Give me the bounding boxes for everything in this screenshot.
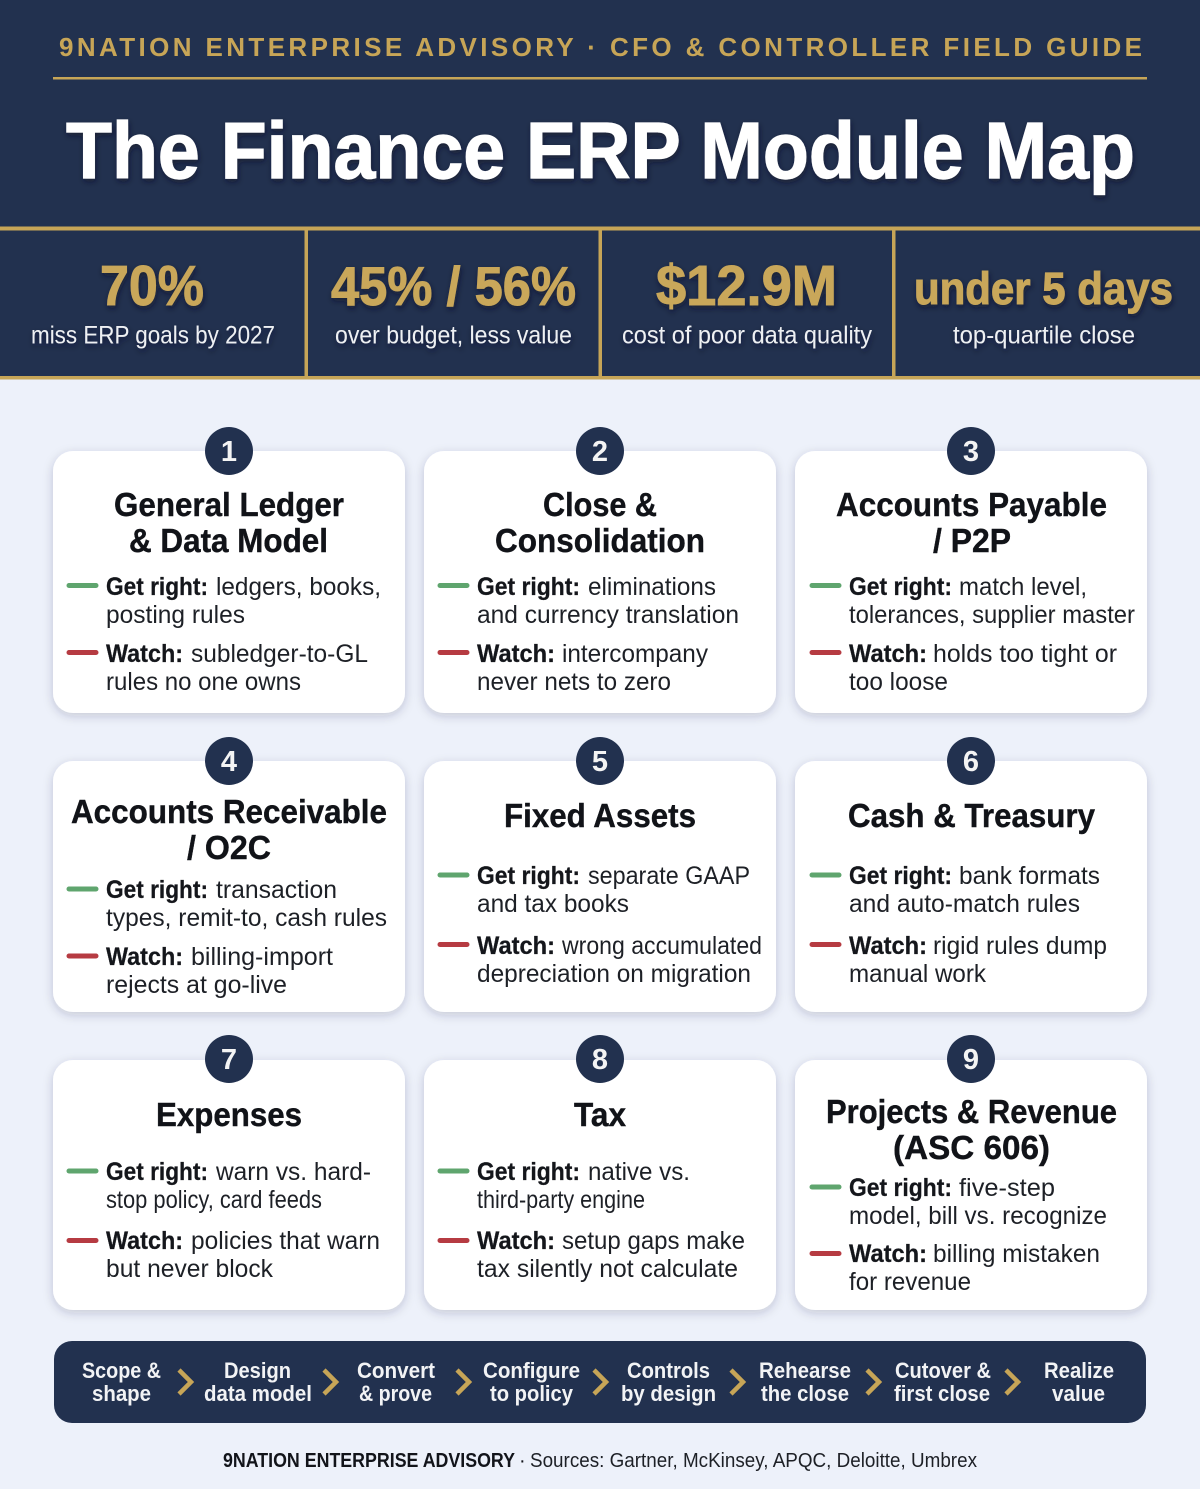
card 2: Close & Consolidation: intercompany <box>562 640 708 668</box>
card 4: Accounts Receivable: Get right: <box>106 876 208 904</box>
card 2: Close & Consolidation: Close & <box>543 486 657 523</box>
card 9: Projects & Revenue: (ASC 606) <box>893 1129 1050 1166</box>
card 7: Expenses: Expenses <box>156 1096 302 1133</box>
card 9: Projects & Revenue: Get right: <box>849 1174 952 1202</box>
card 3: Accounts Payable: Accounts Payable <box>836 486 1107 523</box>
arrow 3 <box>457 1370 469 1394</box>
step 2 <box>204 1358 312 1406</box>
step 6: the close <box>761 1381 849 1406</box>
step 1 <box>82 1358 161 1406</box>
arrow 2 <box>324 1370 336 1394</box>
card 6: Cash & Treasury: Watch: <box>849 932 927 960</box>
card 7: Expenses: Watch: <box>106 1227 183 1255</box>
card 6: Cash & Treasury: and auto-match rules <box>849 890 1080 918</box>
card 2: Close & Consolidation: 2 <box>592 436 608 468</box>
card 1: General Ledger: subledger-to-GL <box>191 640 368 668</box>
card 6: Cash & Treasury <box>795 737 1147 1012</box>
card 4: Accounts Receivable: Accounts Receivable <box>71 793 387 830</box>
stat: 70% <box>31 254 275 350</box>
arrow 7 <box>1006 1370 1018 1394</box>
card 3: Accounts Payable: holds too tight or <box>933 640 1117 668</box>
stat: 45% / 56% <box>331 255 576 350</box>
card 2: Close & Consolidation: Get right: <box>477 573 580 601</box>
card 2: Close & Consolidation: never nets to zero <box>477 668 671 696</box>
step 6 <box>759 1358 851 1406</box>
step 8: value <box>1052 1381 1105 1406</box>
stat: under 5 days: under 5 days <box>914 263 1173 314</box>
card 9: Projects & Revenue: five-step <box>959 1174 1055 1202</box>
card 3: Accounts Payable: 3 <box>963 436 979 468</box>
card 5: Fixed Assets: Fixed Assets <box>504 797 696 834</box>
stat: 45% / 56%: 45% / 56% <box>331 255 576 317</box>
card 7: Expenses <box>53 1035 405 1310</box>
footer sources: · <box>519 1450 526 1472</box>
step 2: Design <box>224 1358 291 1383</box>
footer sources: Sources: Gartner, McKinsey, APQC, Deloitte, Umbrex <box>530 1450 977 1472</box>
step 5: Controls <box>627 1358 710 1383</box>
card 4: Accounts Receivable: Watch: <box>106 943 183 971</box>
step 4: Configure <box>483 1358 580 1383</box>
step 5 <box>621 1358 716 1406</box>
card 4: Accounts Receivable: / O2C <box>187 829 271 866</box>
card 7: Expenses: Get right: <box>106 1158 208 1186</box>
step 5: by design <box>621 1381 716 1406</box>
stat: 70%: miss ERP goals by 2027 <box>31 322 275 350</box>
step 2: data model <box>204 1381 312 1406</box>
card 2: Close & Consolidation: Watch: <box>477 640 555 668</box>
card 7: Expenses: stop policy, card feeds <box>106 1186 322 1214</box>
stat: under 5 days: top-quartile close <box>953 322 1135 350</box>
card 5: Fixed Assets: Watch: <box>477 932 555 960</box>
stat: 45% / 56%: over budget, less value <box>335 322 572 350</box>
card 8: Tax: third-party engine <box>477 1186 645 1214</box>
card 2: Close & Consolidation: and currency translation <box>477 601 739 629</box>
card 7: Expenses: warn vs. hard- <box>215 1158 371 1186</box>
card 6: Cash & Treasury: 6 <box>963 746 979 778</box>
card 8: Tax: Tax <box>574 1096 627 1133</box>
card 4: Accounts Receivable <box>53 737 405 1012</box>
card 4: Accounts Receivable: transaction <box>216 876 337 904</box>
arrow 1 <box>179 1370 191 1394</box>
card 7: Expenses: policies that warn <box>191 1227 380 1255</box>
card 9: Projects & Revenue: model, bill vs. recognize <box>849 1202 1107 1230</box>
card 2: Close & Consolidation: eliminations <box>588 573 716 601</box>
step 1: shape <box>92 1381 151 1406</box>
card 8: Tax <box>424 1035 776 1310</box>
card 7: Expenses: 7 <box>221 1044 237 1076</box>
card 1: General Ledger: ledgers, books, <box>216 573 381 601</box>
card 5: Fixed Assets: Get right: <box>477 862 580 890</box>
card 5: Fixed Assets: depreciation on migration <box>477 960 751 988</box>
card 8: Tax: Watch: <box>477 1227 555 1255</box>
stat: $12.9M <box>622 254 872 350</box>
stat: $12.9M: $12.9M <box>656 254 837 318</box>
card 9: Projects & Revenue <box>795 1035 1147 1310</box>
card 1: General Ledger: posting rules <box>106 601 245 629</box>
card 4: Accounts Receivable: rejects at go-live <box>106 971 287 999</box>
eyebrow: 9NATION ENTERPRISE ADVISORY · CFO & CONTROLLER FIELD GUIDE <box>59 32 1142 62</box>
card 5: Fixed Assets <box>424 737 776 1012</box>
roadmap bar <box>54 1341 1146 1423</box>
card 8: Tax: 8 <box>592 1044 608 1076</box>
stat: $12.9M: cost of poor data quality <box>622 322 872 350</box>
card 9: Projects & Revenue: billing mistaken <box>933 1240 1100 1268</box>
step 3: & prove <box>359 1381 432 1406</box>
card 4: Accounts Receivable: types, remit-to, cash rules <box>106 904 387 932</box>
card 8: Tax: native vs. <box>588 1158 690 1186</box>
card 1: General Ledger: 1 <box>221 436 237 468</box>
card 6: Cash & Treasury: Get right: <box>849 862 952 890</box>
card 4: Accounts Receivable: billing-import <box>191 943 333 971</box>
card 9: Projects & Revenue: Watch: <box>849 1240 927 1268</box>
stats strip <box>0 226 1200 380</box>
card 5: Fixed Assets: wrong accumulated <box>561 932 762 960</box>
card 3: Accounts Payable: tolerances, supplier master <box>849 601 1135 629</box>
card 8: Tax: tax silently not calculate <box>477 1255 738 1283</box>
card 9: Projects & Revenue: 9 <box>963 1044 979 1076</box>
step 3 <box>357 1358 436 1406</box>
arrow 4 <box>594 1370 606 1394</box>
card 5: Fixed Assets: 5 <box>592 746 608 778</box>
stat: 70%: 70% <box>100 254 204 318</box>
card 6: Cash & Treasury: manual work <box>849 960 986 988</box>
arrow 6 <box>867 1370 879 1394</box>
step 8 <box>1044 1358 1114 1406</box>
card 8: Tax: Get right: <box>477 1158 580 1186</box>
card 1: General Ledger: Watch: <box>106 640 183 668</box>
step 7: first close <box>894 1381 990 1406</box>
card 1: General Ledger: rules no one owns <box>106 668 301 696</box>
card 4: Accounts Receivable: 4 <box>221 746 237 778</box>
step 4: to policy <box>490 1381 574 1406</box>
step 7 <box>894 1358 991 1406</box>
step 3: Convert <box>357 1358 436 1383</box>
card 3: Accounts Payable <box>795 427 1147 713</box>
arrow 5 <box>731 1370 743 1394</box>
card 3: Accounts Payable: match level, <box>959 573 1087 601</box>
card 3: Accounts Payable: Watch: <box>849 640 927 668</box>
step 6: Rehearse <box>759 1358 851 1383</box>
card 9: Projects & Revenue: for revenue <box>849 1268 971 1296</box>
card 9: Projects & Revenue: Projects & Revenue <box>826 1093 1117 1130</box>
card 8: Tax: setup gaps make <box>562 1227 745 1255</box>
card 1: General Ledger <box>53 427 405 713</box>
card 6: Cash & Treasury: rigid rules dump <box>933 932 1107 960</box>
card 6: Cash & Treasury: Cash & Treasury <box>848 797 1096 834</box>
card 5: Fixed Assets: separate GAAP <box>588 862 750 890</box>
step 4 <box>483 1358 580 1406</box>
title: The Finance ERP Module Map <box>66 106 1135 195</box>
card 5: Fixed Assets: and tax books <box>477 890 629 918</box>
card 3: Accounts Payable: / P2P <box>933 522 1011 559</box>
card 1: General Ledger: General Ledger <box>114 486 344 523</box>
step 8: Realize <box>1044 1358 1114 1383</box>
footer sources <box>223 1450 977 1472</box>
footer sources: 9NATION ENTERPRISE ADVISORY <box>223 1450 516 1472</box>
card 1: General Ledger: & Data Model <box>129 522 328 559</box>
step 1: Scope & <box>82 1358 161 1383</box>
card 2: Close & Consolidation <box>424 427 776 713</box>
card 7: Expenses: but never block <box>106 1255 273 1283</box>
card 6: Cash & Treasury: bank formats <box>959 862 1100 890</box>
card 3: Accounts Payable: Get right: <box>849 573 952 601</box>
card 3: Accounts Payable: too loose <box>849 668 948 696</box>
step 7: Cutover & <box>895 1358 991 1383</box>
stat: under 5 days <box>914 263 1173 350</box>
card 1: General Ledger: Get right: <box>106 573 208 601</box>
card 2: Close & Consolidation: Consolidation <box>495 522 705 559</box>
header band <box>0 0 1200 379</box>
